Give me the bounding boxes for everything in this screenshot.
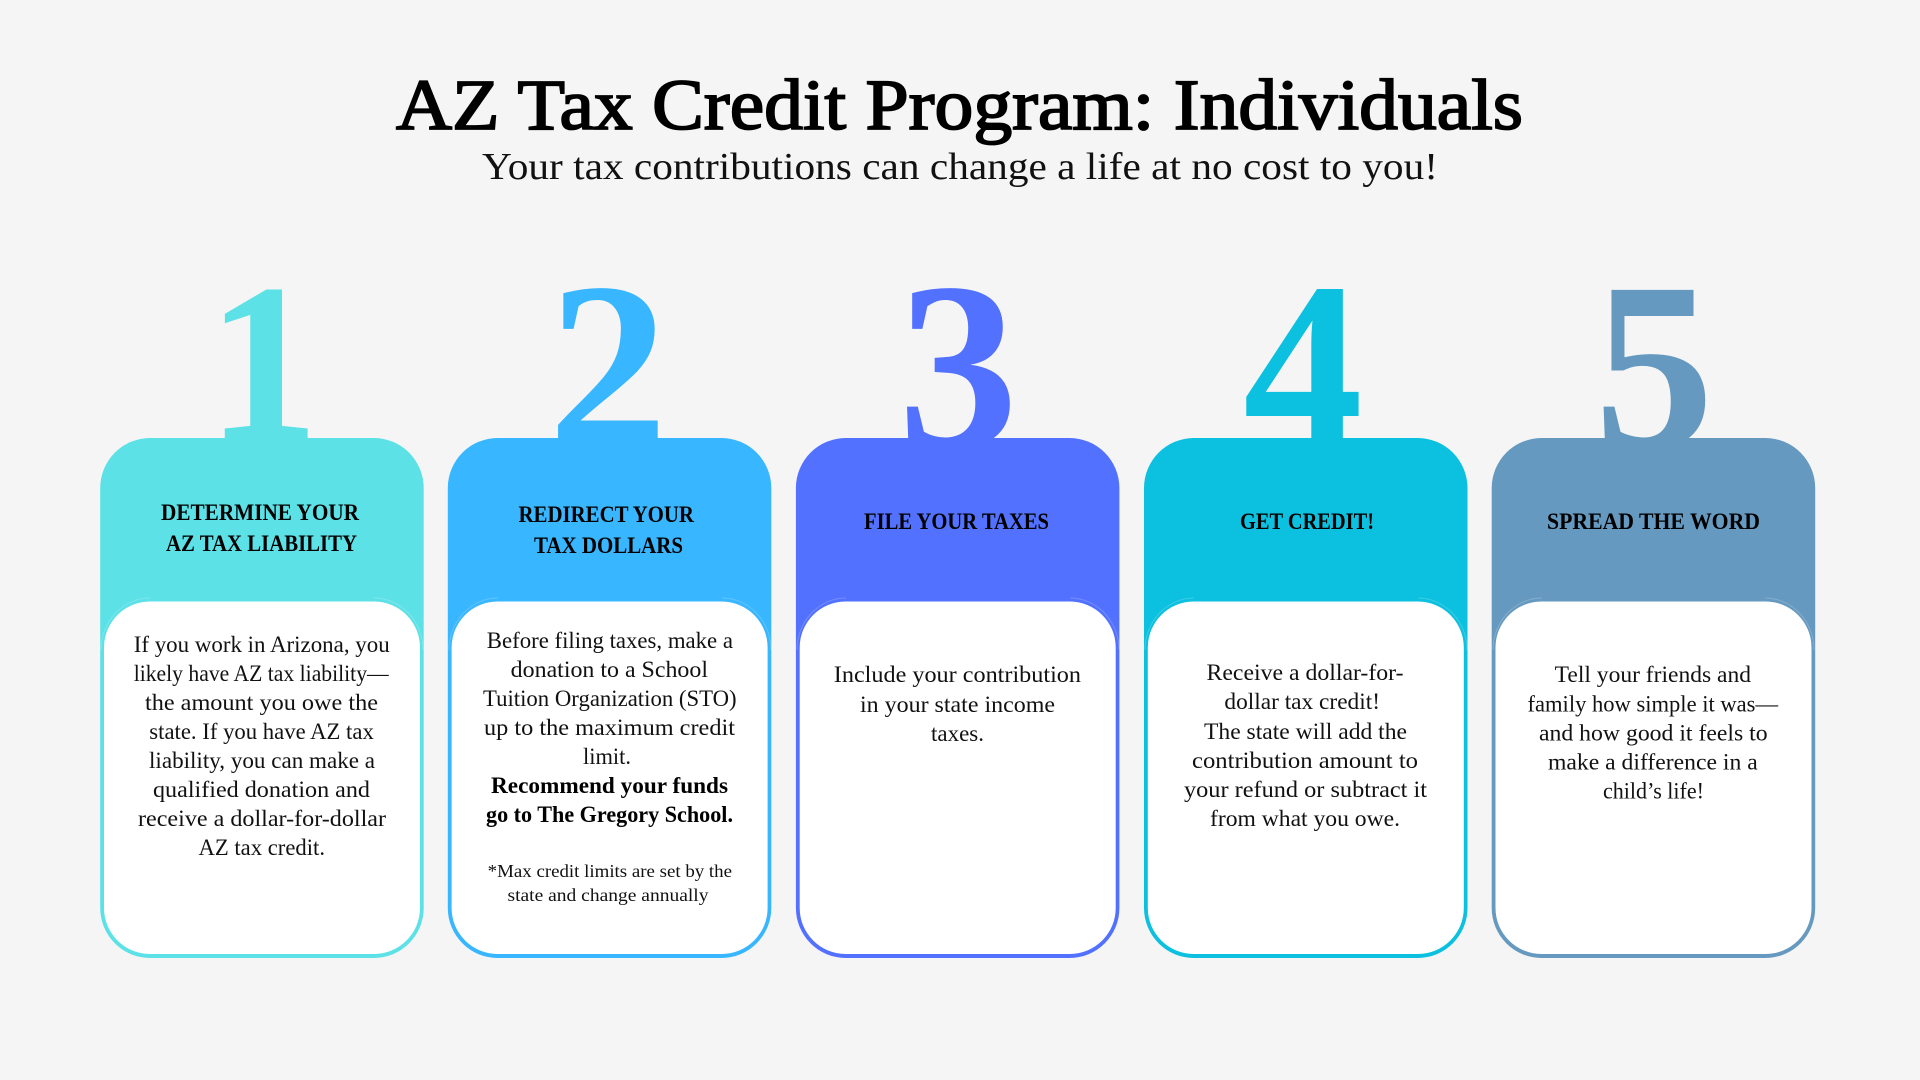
panel: step 2 — [448, 233, 771, 958]
footnote: step 2 — [488, 861, 732, 905]
text: step 3: Include your contribution — [834, 662, 1082, 687]
subtitle: Your tax contributions can change a life at no cost to you! — [482, 146, 1438, 188]
text: step 5: Tell your friends and — [1555, 662, 1752, 687]
heading: step 2: TAX DOLLARS — [534, 533, 683, 558]
text: step 1: If you work in Arizona, you — [134, 632, 390, 657]
card body: step 5 — [1496, 602, 1812, 954]
text: step 1 — [134, 632, 390, 860]
text: step 1: receive a dollar-for-dollar — [138, 806, 386, 831]
text: step 3: taxes. — [931, 721, 984, 746]
card body: step 1 — [104, 602, 420, 954]
heading: step 1: DETERMINE YOUR — [161, 500, 359, 525]
text: step 5: family how simple it was— — [1528, 692, 1779, 716]
callout: recommend funds: Recommend your funds — [491, 773, 728, 798]
number 1: 1 — [207, 237, 319, 487]
text: step 4: Receive a dollar-for- — [1206, 660, 1404, 685]
card header: step 1 — [100, 438, 424, 958]
heading: step 1: AZ TAX LIABILITY — [166, 531, 357, 556]
number 5: 5 — [1594, 233, 1714, 499]
text: step 4: your refund or subtract it — [1184, 777, 1428, 802]
text: step 4 — [1184, 660, 1428, 831]
number 4: 4 — [1243, 233, 1363, 499]
footnote: step 2: state and change annually — [508, 885, 708, 905]
panel: step 4 — [1144, 233, 1468, 958]
heading: step 3: FILE YOUR TAXES — [864, 509, 1049, 534]
heading: step 5: SPREAD THE WORD — [1547, 509, 1760, 534]
text: step 5: make a difference in a — [1548, 750, 1758, 774]
heading: step 2 — [518, 502, 694, 558]
text: step 4: The state will add the — [1204, 719, 1407, 744]
text: step 4: dollar tax credit! — [1224, 689, 1380, 714]
panel: step 1 — [100, 237, 424, 958]
card body: step 3 — [800, 602, 1116, 954]
card header: step 3 — [796, 438, 1119, 958]
footnote: step 2: *Max credit limits are set by the — [488, 861, 732, 881]
text: step 1: state. If you have AZ tax — [149, 719, 374, 744]
text: step 1: the amount you owe the — [145, 690, 378, 715]
text: step 5 — [1528, 662, 1779, 804]
number 3: 3 — [898, 233, 1018, 499]
card header: step 2 — [448, 438, 771, 958]
text: step 5: and how good it feels to — [1539, 720, 1768, 746]
text: step 1: likely have AZ tax liability— — [134, 661, 390, 686]
text: step 2: up to the maximum credit — [484, 715, 736, 740]
text: step 3 — [834, 662, 1082, 746]
text: step 1: AZ tax credit. — [198, 835, 325, 860]
text: step 2 — [483, 628, 737, 769]
text: step 1: liability, you can make a — [149, 748, 375, 773]
title: AZ Tax Credit Program: Individuals — [396, 65, 1523, 145]
text: step 4: contribution amount to — [1192, 748, 1418, 773]
callout: recommend funds — [486, 773, 733, 827]
text: step 4: from what you owe. — [1210, 806, 1400, 831]
text: step 2: Tuition Organization (STO) — [483, 686, 737, 711]
card header: step 5 — [1492, 438, 1815, 958]
panel: step 3 — [796, 233, 1119, 958]
heading: step 2: REDIRECT YOUR — [518, 502, 694, 527]
heading: step 4: GET CREDIT! — [1240, 509, 1374, 534]
number 2: 2 — [548, 233, 668, 499]
text: step 2: donation to a School — [511, 657, 708, 682]
card header: step 4 — [1144, 438, 1468, 958]
text: step 3: in your state income — [860, 692, 1055, 717]
card body: step 4 — [1148, 602, 1464, 954]
text: step 2: limit. — [583, 744, 631, 769]
text: step 2: Before filing taxes, make a — [487, 628, 733, 653]
card body: step 2 — [452, 602, 768, 954]
text: step 5: child’s life! — [1603, 778, 1704, 804]
text: step 1: qualified donation and — [153, 777, 371, 802]
callout: recommend funds: go to The Gregory School. — [486, 802, 733, 827]
heading: step 1 — [161, 500, 359, 556]
panel: step 5 — [1492, 233, 1815, 958]
